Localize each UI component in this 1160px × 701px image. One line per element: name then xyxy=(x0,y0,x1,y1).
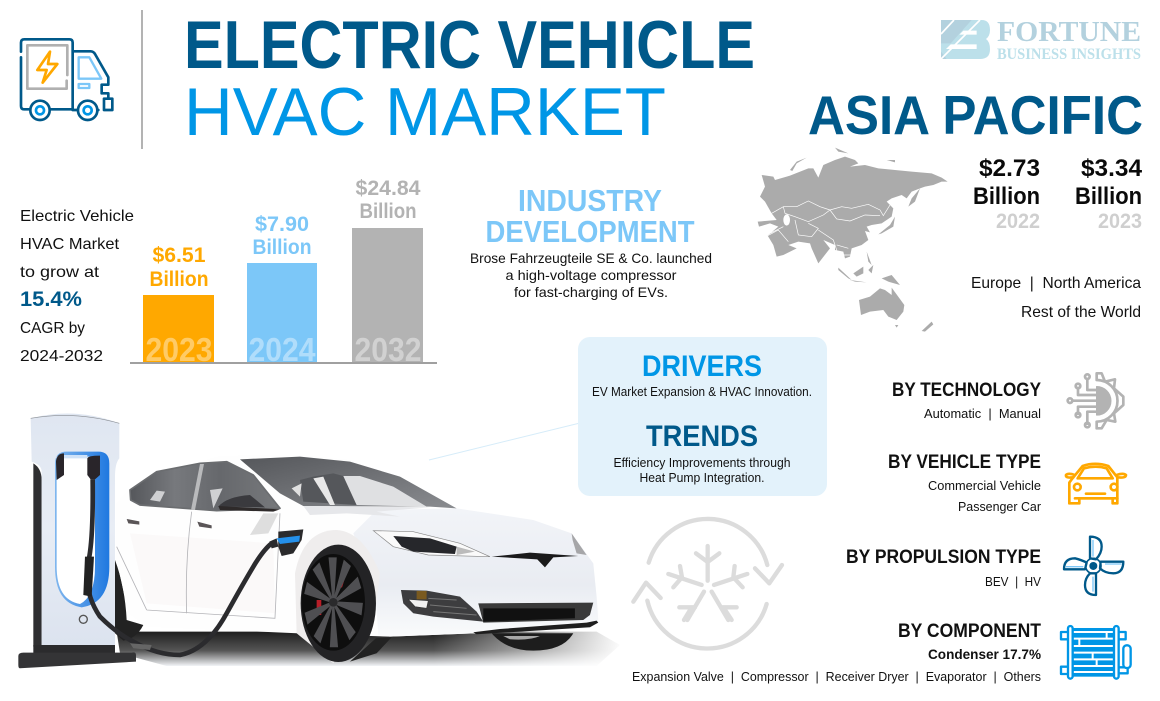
icon: condenser xyxy=(1061,626,1131,679)
icon: fan xyxy=(1064,537,1123,595)
title xyxy=(184,7,755,150)
headlight xyxy=(373,531,490,557)
segment: by propulsion type: BEV | HV xyxy=(985,574,1041,589)
panel: drivers and trends: EV Market Expansion & HVAC Innovation. xyxy=(592,384,812,399)
side windows xyxy=(130,462,280,511)
front wheel xyxy=(295,530,380,663)
ground shadow xyxy=(117,632,620,666)
segment: by component: Condenser 17.7% xyxy=(928,647,1041,662)
stat: 2022: $2.73 xyxy=(979,155,1040,182)
CAGR text: 2024-2032 xyxy=(20,348,103,365)
segment: by vehicle type xyxy=(888,452,1042,514)
bar chart: $7.90 xyxy=(255,213,309,236)
logo: Fortune Business Insights: BUSINESS INSIGHTS xyxy=(997,46,1141,63)
bar chart: Billion xyxy=(360,200,416,223)
stat: 2023: 2023 xyxy=(1098,210,1142,233)
stat: 2022: 2022 xyxy=(996,210,1040,233)
divider xyxy=(141,10,143,149)
CAGR text: Electric Vehicle xyxy=(20,208,134,225)
segment: by technology xyxy=(892,380,1041,421)
panel: drivers and trends xyxy=(578,337,827,496)
industry development: for fast-charging of EVs. xyxy=(514,284,668,300)
industry development: a high-voltage compressor xyxy=(506,267,677,283)
bar chart xyxy=(130,177,437,368)
icon: digital gear xyxy=(1068,373,1123,428)
charge port and connector xyxy=(278,529,303,556)
bar chart: 2032 xyxy=(354,331,422,368)
icon: electric truck xyxy=(21,39,112,120)
regions list: Europe | North America xyxy=(971,275,1141,292)
segment: by vehicle type: BY VEHICLE TYPE xyxy=(888,452,1041,473)
segment: by component xyxy=(632,621,1041,684)
industry development: INDUSTRY xyxy=(518,183,662,218)
bar chart: 2024 xyxy=(248,331,316,368)
panel: drivers and trends: DRIVERS xyxy=(642,350,762,383)
CAGR text xyxy=(20,208,134,365)
title: HVAC MARKET xyxy=(184,74,666,150)
stat: 2022 xyxy=(973,155,1040,233)
door lines and handles xyxy=(117,512,280,618)
segment: by vehicle type: Commercial Vehicle xyxy=(928,478,1041,493)
segment: by component: BY COMPONENT xyxy=(898,621,1041,642)
CAGR text: CAGR by xyxy=(20,320,85,337)
CAGR text: HVAC Market xyxy=(20,236,120,253)
charging cable xyxy=(87,479,272,655)
hood and nose xyxy=(353,508,598,637)
icon: car xyxy=(1066,464,1126,503)
segment: by technology: Automatic | Manual xyxy=(924,406,1041,421)
panel: drivers and trends: Heat Pump Integration. xyxy=(640,470,764,485)
CAGR text: 15.4% xyxy=(20,288,82,311)
bar chart: $6.51 xyxy=(152,244,206,267)
segment: by propulsion type xyxy=(846,547,1041,589)
CAGR text: to grow at xyxy=(20,264,100,281)
stat: 2022: Billion xyxy=(973,183,1040,210)
title: ELECTRIC VEHICLE xyxy=(184,7,755,83)
panel: drivers and trends: TRENDS xyxy=(646,420,758,453)
industry development xyxy=(470,183,712,300)
heading: Asia Pacific: ASIA PACIFIC xyxy=(808,84,1143,146)
industry development: Brose Fahrzeugteile SE & Co. launched xyxy=(470,250,712,266)
stat: 2023: $3.34 xyxy=(1081,155,1143,182)
segment: by propulsion type: BY PROPULSION TYPE xyxy=(846,547,1041,568)
illustration: electric car at charger xyxy=(18,414,623,670)
bar chart: 2023 xyxy=(146,331,212,368)
stat: 2023 xyxy=(1075,155,1143,233)
bar chart: Billion xyxy=(252,236,312,259)
map: Asia Pacific xyxy=(758,148,948,332)
car body xyxy=(116,455,600,637)
bar chart: Billion xyxy=(150,268,208,291)
stat: 2023: Billion xyxy=(1075,183,1142,210)
segment: by vehicle type: Passenger Car xyxy=(958,499,1042,514)
logo: Fortune Business Insights: FORTUNE xyxy=(997,16,1141,48)
charging station xyxy=(33,463,42,647)
industry development: DEVELOPMENT xyxy=(486,214,695,249)
nose badge band and side vent xyxy=(492,553,578,567)
segment: by component: Expansion Valve | Compressor | Receiver Dryer | Evaporator | Others xyxy=(632,669,1041,684)
bar chart: $24.84 xyxy=(356,177,421,200)
panel: drivers and trends: Efficiency Improvements through xyxy=(614,455,790,470)
windshield xyxy=(240,457,457,508)
segment: by technology: BY TECHNOLOGY xyxy=(892,380,1041,401)
icon: snowflake cycle xyxy=(633,519,782,649)
connector line xyxy=(429,423,580,460)
fog panel and grille xyxy=(401,590,483,622)
regions list xyxy=(971,275,1141,321)
regions list: Rest of the World xyxy=(1021,304,1141,321)
far wheels xyxy=(115,560,143,641)
logo: Fortune Business Insights xyxy=(941,16,1141,63)
